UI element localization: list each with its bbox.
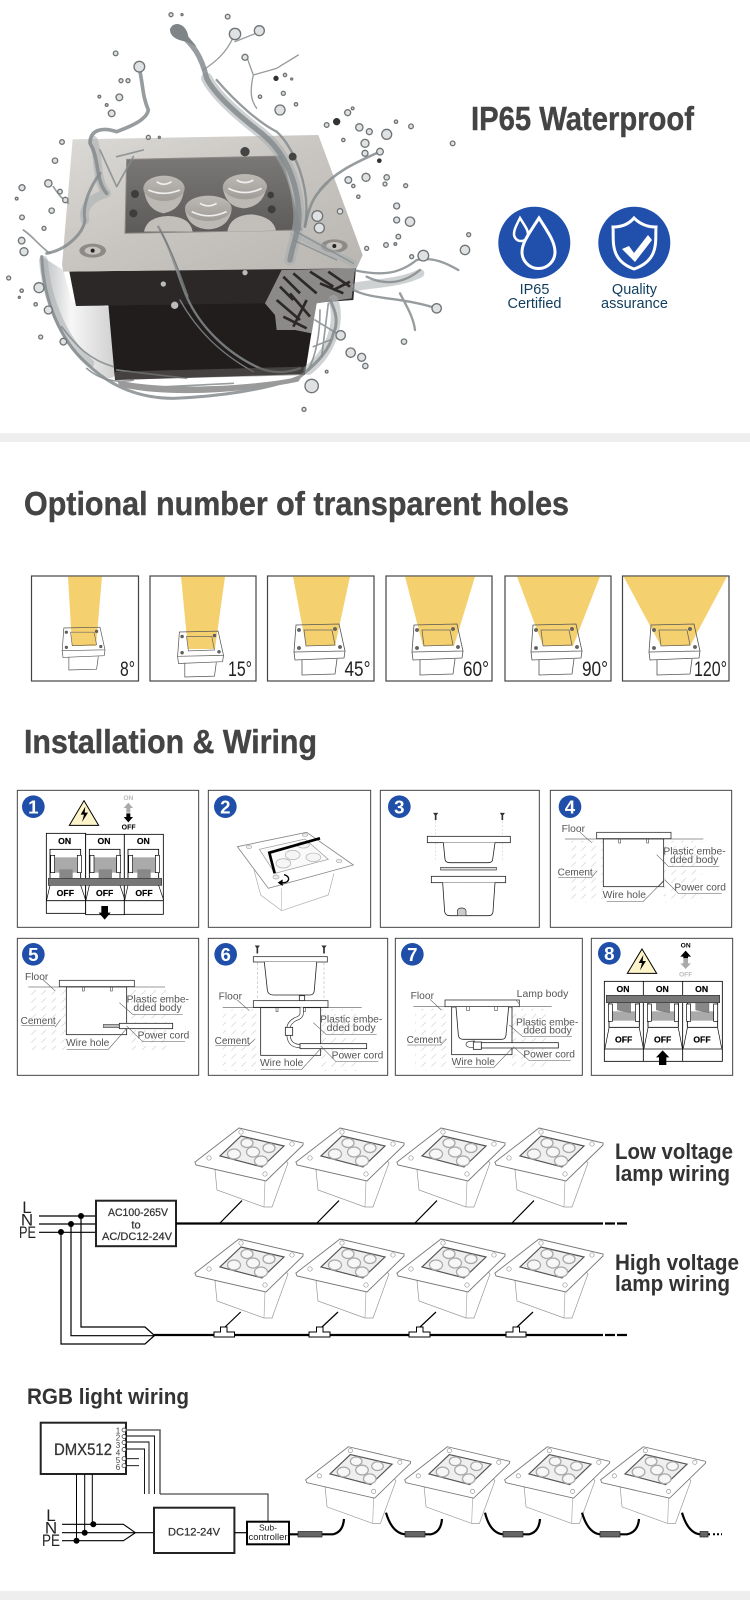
step panels left group bbox=[17, 790, 388, 1075]
panel: 120 degree beam bbox=[622, 576, 729, 681]
panel: 8 degree beam bbox=[32, 576, 138, 681]
lamp screws bbox=[79, 239, 348, 258]
divider band top bbox=[0, 433, 750, 442]
water over lamp body bbox=[265, 268, 355, 333]
diagram: DMX512 controller: DMX512 bbox=[54, 1440, 112, 1459]
panel: step 4 floor cross-section: Wire hole bbox=[603, 890, 646, 901]
panel: step 6 lamp insert: Plastic embe- bbox=[320, 1015, 382, 1026]
panel: step 1 power off: ON bbox=[98, 836, 110, 846]
panel: step 6 lamp insert: Floor bbox=[219, 991, 243, 1002]
lamp window bbox=[125, 156, 302, 233]
panel: step 8 power on: ON bbox=[617, 984, 629, 994]
box: sub-controller: controller bbox=[248, 1532, 288, 1542]
panel: 60 degree beam bbox=[386, 576, 492, 681]
label: low voltage lamp wiring: lamp wiring bbox=[615, 1161, 730, 1186]
lamp row: high voltage bbox=[195, 1239, 603, 1318]
box: AC to DC converter: to bbox=[131, 1220, 141, 1232]
panel: step 7 installed lamp: 7 bbox=[407, 944, 418, 965]
lamp lower body bbox=[108, 300, 317, 380]
diagram: DMX512 controller: 4 bbox=[116, 1448, 121, 1458]
icon: quality assurance badge: Quality bbox=[612, 282, 658, 298]
box: DC12-24V supply bbox=[154, 1508, 247, 1553]
diagram: RGB mains lines: N bbox=[45, 1518, 57, 1538]
lamp row: low voltage bbox=[195, 1128, 603, 1207]
panel: step 5 cord insert: Floor bbox=[25, 972, 49, 983]
divider band bottom bbox=[0, 1591, 750, 1600]
panel: step 1 power off bbox=[17, 790, 199, 927]
panel: step 6 lamp insert: Cement bbox=[215, 1036, 250, 1047]
panel: step 7 installed lamp: Floor bbox=[411, 991, 435, 1002]
diagram: DMX512 controller: 6 bbox=[116, 1463, 121, 1472]
panel: 45 degree beam bbox=[268, 576, 374, 681]
lamp LED lenses bbox=[129, 174, 276, 232]
lamp row: RGB bbox=[306, 1447, 705, 1523]
panel: step 7 installed lamp: dded body bbox=[523, 1026, 572, 1037]
panel: step 7 installed lamp: Wire hole bbox=[452, 1057, 495, 1068]
panel: step 5 cord insert bbox=[17, 938, 199, 1075]
lamp flange bbox=[62, 135, 363, 272]
diagram: DMX512 controller: 2 bbox=[116, 1434, 121, 1442]
panel: step 8 power on: OFF bbox=[615, 1035, 632, 1045]
diagram: mains wiring bbox=[19, 1198, 154, 1344]
label: low voltage lamp wiring: Low voltage bbox=[615, 1139, 733, 1164]
panel: step 2 remove screws: 2 bbox=[220, 796, 231, 817]
panel: step 2 remove screws bbox=[208, 790, 371, 927]
panel: step 1 power off: 1 bbox=[28, 796, 39, 817]
lamp upper body bbox=[69, 267, 356, 306]
panel: step 4 floor cross-section: Cement bbox=[558, 868, 593, 879]
panel: step 4 floor cross-section: 4 bbox=[565, 796, 576, 817]
panel: step 5 cord insert: dded body bbox=[133, 1003, 182, 1014]
diagram: mains wiring: PE bbox=[19, 1223, 36, 1242]
panel: step 1 power off: ON bbox=[58, 836, 71, 846]
panel: step 5 cord insert: Wire hole bbox=[66, 1038, 109, 1049]
panel: 15 degree beam: 15° bbox=[228, 658, 252, 681]
panel: 60 degree beam: 60° bbox=[463, 658, 489, 681]
water texture on body bbox=[277, 272, 350, 328]
panel: 8 degree beam: 8° bbox=[120, 658, 135, 681]
panel: step 4 floor cross-section bbox=[550, 790, 732, 927]
diagram: mains wiring: N bbox=[21, 1210, 33, 1230]
panel: step 1 power off: ON bbox=[137, 836, 150, 846]
panel: step 8 power on: OFF bbox=[693, 1035, 711, 1045]
wires: low voltage line bbox=[176, 1201, 627, 1224]
box: DC12-24V supply: DC12-24V bbox=[168, 1527, 221, 1539]
panel: step 8 power on: ON bbox=[681, 942, 691, 949]
panel: step 8 power on: 8 bbox=[604, 943, 615, 964]
panel: step 1 power off: ON bbox=[123, 795, 134, 802]
panel: step 6 lamp insert: dded body bbox=[327, 1023, 376, 1034]
panel: step 1 power off: OFF bbox=[122, 825, 136, 832]
hero photo: lamp in water splash bbox=[7, 13, 471, 411]
panel: step 8 power on: ON bbox=[656, 984, 669, 994]
panel: step 7 installed lamp: Lamp body bbox=[517, 989, 569, 1000]
panel: step 6 lamp insert bbox=[208, 938, 388, 1075]
diagram: DMX512 controller bbox=[41, 1423, 268, 1522]
panel: step 8 power on: OFF bbox=[654, 1035, 671, 1045]
step panels right group bbox=[380, 790, 733, 1075]
panel: step 7 installed lamp bbox=[395, 938, 582, 1075]
label: high voltage lamp wiring bbox=[615, 1250, 739, 1296]
panel: step 4 floor cross-section: dded body bbox=[670, 855, 719, 866]
panel: step 4 floor cross-section: Plastic embe- bbox=[663, 847, 726, 858]
panel: step 8 power on: OFF bbox=[679, 972, 692, 979]
panel: step 5 cord insert: Power cord bbox=[138, 1030, 189, 1041]
box: sub-controller: Sub- bbox=[259, 1523, 277, 1533]
water strands bbox=[23, 32, 458, 398]
icon: quality assurance badge bbox=[598, 207, 670, 312]
icon: IP65 certified badge bbox=[498, 207, 570, 312]
label: high voltage lamp wiring: lamp wiring bbox=[615, 1271, 730, 1296]
panel: step 6 lamp insert: Wire hole bbox=[260, 1058, 303, 1069]
icon: IP65 certified badge: IP65 bbox=[520, 282, 549, 298]
heading: IP65 Waterproof: IP65 Waterproof bbox=[471, 100, 695, 137]
water sheet behind lamp bbox=[42, 257, 115, 378]
panel: step 1 power off: OFF bbox=[135, 888, 153, 898]
panel: step 7 installed lamp: Cement bbox=[407, 1035, 442, 1046]
box: AC to DC converter: AC/DC12-24V bbox=[102, 1231, 173, 1243]
diagram: DMX512 controller: 1 bbox=[116, 1427, 121, 1436]
label: high voltage lamp wiring: High voltage bbox=[615, 1250, 739, 1275]
panel: step 3 gasket exploded view: 3 bbox=[394, 796, 405, 817]
panel: step 3 gasket exploded view bbox=[380, 790, 539, 927]
icon: IP65 certified badge: Certified bbox=[508, 296, 562, 312]
diagram: DMX512 controller: 5 bbox=[116, 1456, 121, 1465]
panel: step 6 lamp insert: Power cord bbox=[332, 1050, 383, 1061]
water droplets bbox=[7, 13, 471, 411]
heading: optional holes: Optional number of transparent holes bbox=[24, 485, 569, 522]
panel: step 8 power on bbox=[591, 938, 733, 1075]
panel: step 6 lamp insert: 6 bbox=[220, 944, 231, 965]
box: AC to DC converter bbox=[96, 1201, 176, 1246]
panel: step 5 cord insert: Plastic embe- bbox=[127, 995, 189, 1006]
panel: step 7 installed lamp: Plastic embe- bbox=[516, 1017, 578, 1028]
diagram: RGB mains lines: L bbox=[46, 1506, 56, 1525]
box: AC to DC converter: AC100-265V bbox=[108, 1207, 169, 1219]
panel: 15 degree beam bbox=[150, 576, 256, 681]
icon: quality assurance badge: assurance bbox=[601, 296, 668, 312]
panel: step 8 power on: ON bbox=[695, 984, 708, 994]
label: low voltage lamp wiring bbox=[615, 1139, 733, 1186]
panel: step 5 cord insert: 5 bbox=[28, 944, 39, 965]
panel: step 1 power off: OFF bbox=[57, 888, 74, 898]
panel: 120 degree beam: 120° bbox=[694, 658, 727, 681]
panel: 45 degree beam: 45° bbox=[344, 658, 370, 681]
heading: installation and wiring: Installation & Wiring bbox=[24, 723, 317, 760]
diagram: RGB mains lines bbox=[42, 1474, 154, 1550]
panel: step 5 cord insert: Cement bbox=[21, 1016, 56, 1027]
heading: RGB light wiring: RGB light wiring bbox=[27, 1384, 189, 1409]
panel: step 4 floor cross-section: Power cord bbox=[674, 882, 726, 893]
panel: step 7 installed lamp: Power cord bbox=[523, 1049, 575, 1060]
diagram: DMX512 controller: 3 bbox=[116, 1441, 121, 1450]
diagram: RGB mains lines: PE bbox=[42, 1531, 60, 1550]
wires: high voltage line bbox=[154, 1312, 627, 1337]
panel: 90 degree beam bbox=[505, 576, 611, 681]
diagram: mains wiring: L bbox=[22, 1198, 32, 1217]
panel: 90 degree beam: 90° bbox=[582, 658, 608, 681]
panel: step 4 floor cross-section: Floor bbox=[562, 824, 586, 835]
wires: RGB lamp cables bbox=[289, 1513, 722, 1537]
panel: step 1 power off: OFF bbox=[96, 888, 113, 898]
box: sub-controller bbox=[247, 1522, 289, 1544]
